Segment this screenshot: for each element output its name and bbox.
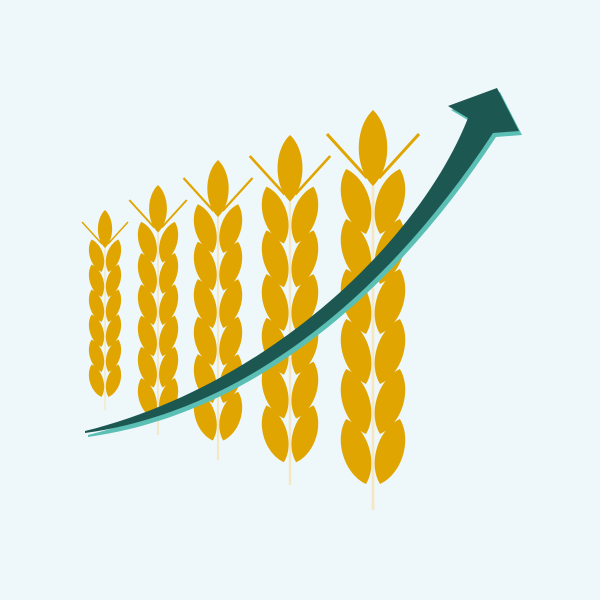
wheat stalk 1: [82, 210, 128, 410]
wheat stalk 4: [250, 135, 330, 485]
arrow: rising trend: [85, 88, 522, 437]
wheat stalk 5: [327, 110, 419, 510]
wheat stalk 3: [184, 160, 252, 460]
wheat stalk 2: [129, 185, 187, 435]
